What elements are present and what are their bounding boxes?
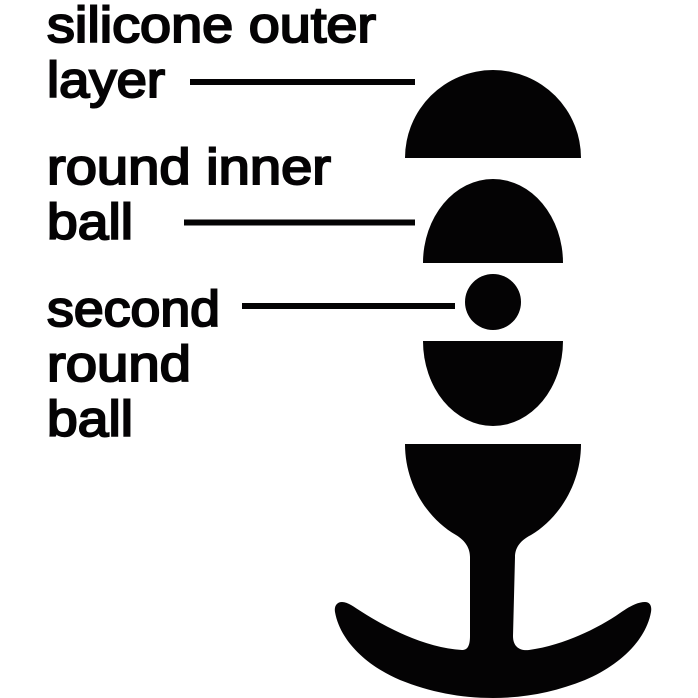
label: second round ball: ball (47, 391, 133, 447)
shape: second round ball (465, 274, 521, 330)
leader line: round inner ball (184, 220, 415, 226)
label: second round ball (47, 281, 220, 447)
shape: inner ball lower half (423, 341, 563, 426)
label: silicone outer layer: layer (47, 52, 165, 108)
label: round inner ball: round inner (47, 139, 331, 195)
shape: base with stem and anchor (335, 444, 651, 698)
label: second round ball: round (47, 336, 191, 392)
label: round inner ball (47, 139, 331, 250)
shape: inner ball upper half (423, 179, 563, 263)
label: silicone outer layer (47, 0, 376, 108)
shape: outer layer dome (405, 70, 581, 158)
label: round inner ball: ball (47, 194, 133, 250)
leader line: second round ball (242, 303, 455, 309)
label: second round ball: second (47, 281, 220, 337)
leader line: silicone outer layer (190, 79, 415, 85)
